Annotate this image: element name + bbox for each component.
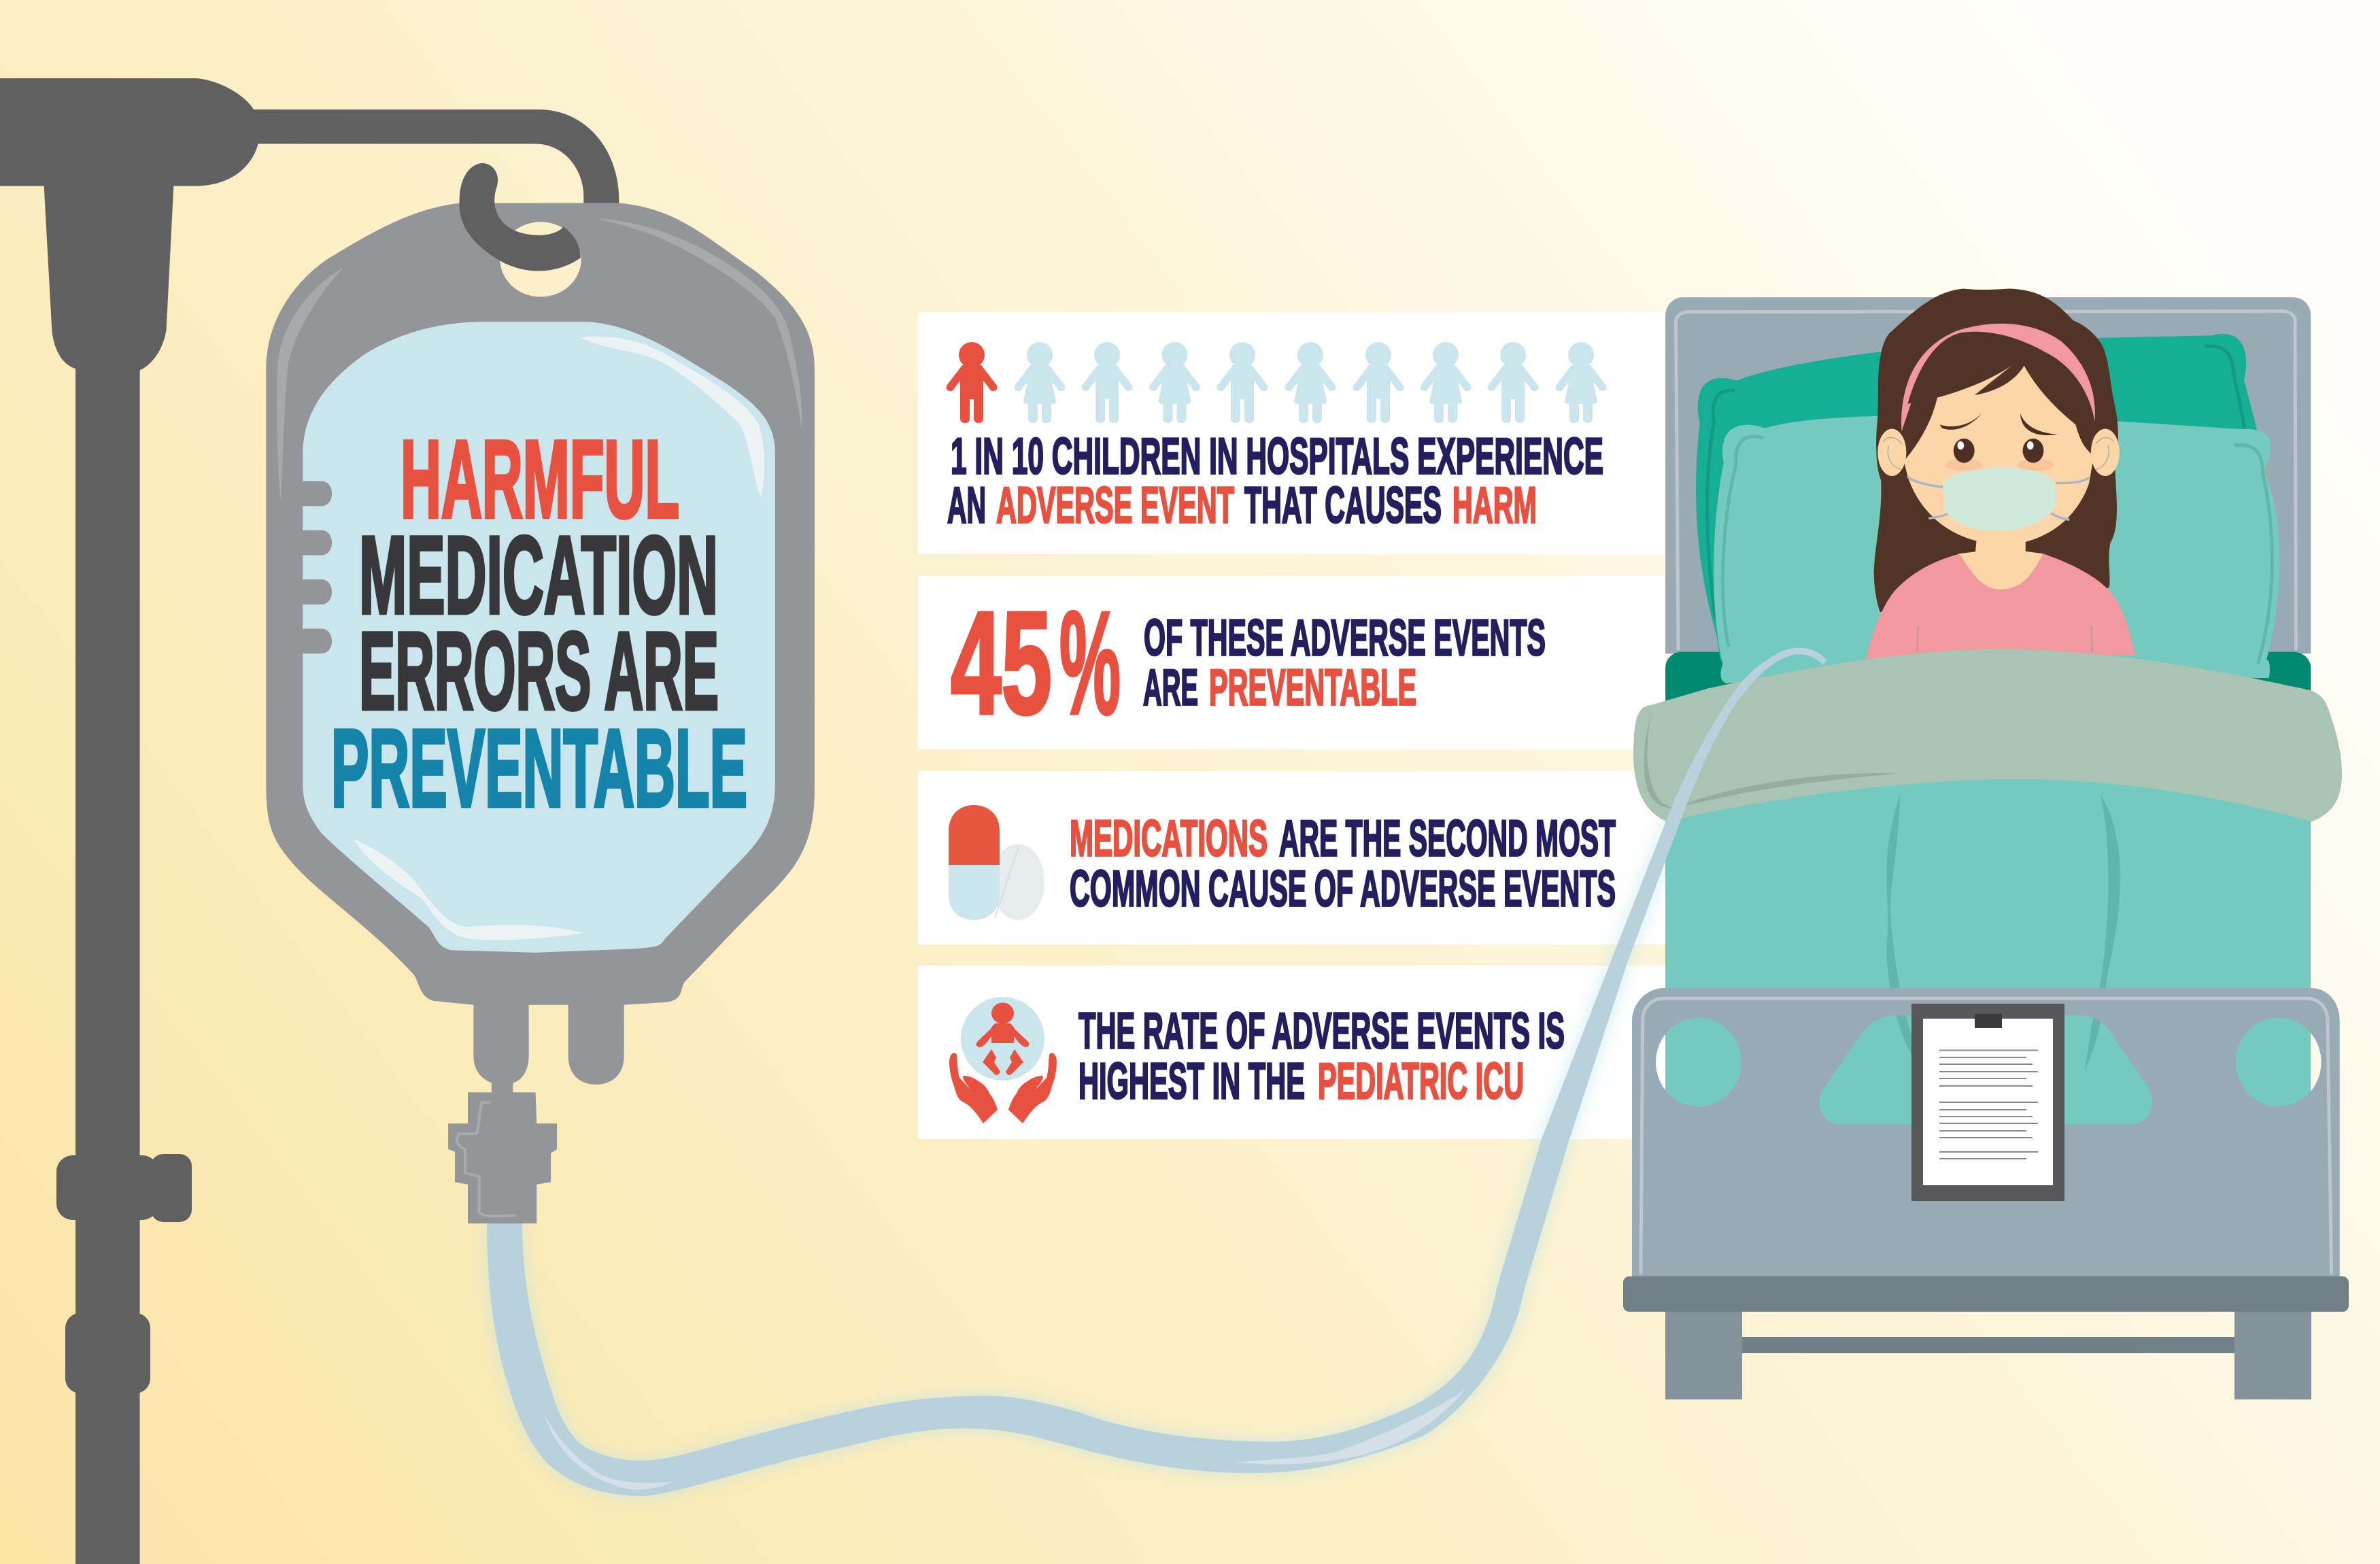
text: are preventable: PREVENTABLE bbox=[1209, 658, 1416, 715]
icon: row of ten children bbox=[947, 342, 1606, 423]
panel: 45 percent preventable: % bbox=[1059, 581, 1121, 745]
text: 1 in 10 children line 2: HARM bbox=[1452, 476, 1537, 533]
text: 1 in 10 children line 1: 1 IN 10 CHILDREN IN HOSPITALS EXPERIENCE bbox=[951, 427, 1603, 484]
clipboard bbox=[1911, 1004, 2064, 1201]
IV bag bbox=[266, 163, 815, 1223]
title: preventable: PREVENTABLE bbox=[331, 707, 747, 830]
icon: capsule and tablet bbox=[949, 805, 1044, 920]
panel: medications second most common cause bbox=[918, 771, 1666, 945]
panel: 45 percent preventable bbox=[918, 576, 1666, 749]
tube glow bbox=[487, 816, 1682, 1496]
face mask bbox=[1943, 467, 2056, 531]
text: 1 in 10 children line 2: THAT CAUSES bbox=[1244, 476, 1442, 533]
title: harmful: HARMFUL bbox=[401, 418, 679, 541]
bed frame bar and legs bbox=[1623, 1276, 2349, 1399]
eyes bbox=[1945, 439, 2054, 471]
IV tube bbox=[487, 648, 1826, 1496]
title: medication: MEDICATION bbox=[359, 514, 718, 636]
text: common cause of adverse events: COMMON CAUSE OF ADVERSE EVENTS bbox=[1070, 860, 1616, 917]
liquid bbox=[303, 322, 775, 953]
bag highlights bbox=[277, 219, 802, 501]
liquid highlights bbox=[354, 337, 764, 940]
headband bbox=[1901, 324, 2095, 432]
panel: pediatric ICU bbox=[918, 966, 1666, 1139]
shirt bbox=[1866, 554, 2135, 659]
eyebrows bbox=[1939, 413, 2058, 435]
pillows bbox=[1696, 334, 2279, 683]
mask straps bbox=[1907, 477, 2089, 520]
text: 1 in 10 children line 2: AN bbox=[947, 476, 986, 533]
text: the rate of adverse events is: THE RATE OF ADVERSE EVENTS IS bbox=[1078, 1002, 1565, 1059]
bag body with hanger hole and connector bbox=[266, 203, 815, 1223]
patient: girl with mask bbox=[1866, 288, 2135, 659]
title: ERRORS ARE bbox=[359, 609, 719, 733]
illustration: hospital bed and patient bbox=[1623, 288, 2349, 1399]
title bbox=[331, 418, 747, 830]
text: 1 in 10 children line 2: ADVERSE EVENT bbox=[996, 476, 1234, 533]
footboard bbox=[1632, 988, 2340, 1276]
text: are preventable: ARE bbox=[1143, 658, 1198, 715]
bed body teal bbox=[1665, 748, 2311, 1170]
bedsheet folds bbox=[1886, 794, 2120, 1070]
text: medications are the second most: ARE THE SECOND MOST bbox=[1279, 809, 1616, 866]
text: medications are the second most: MEDICATIONS bbox=[1070, 809, 1268, 866]
connector highlight bbox=[457, 1102, 516, 1216]
hook bbox=[459, 163, 581, 271]
text: of these adverse events: OF THESE ADVERSE EVENTS bbox=[1144, 609, 1546, 666]
stat: 45%: 45 bbox=[951, 581, 1052, 745]
icon: baby in caring hands bbox=[949, 997, 1057, 1123]
ears bbox=[1877, 429, 2120, 476]
text: highest in the pediatric ICU: PEDIATRIC ICU bbox=[1318, 1053, 1524, 1110]
text: highest in the pediatric ICU: HIGHEST IN THE bbox=[1078, 1053, 1305, 1110]
panel: 1 in 10 children bbox=[918, 312, 1666, 554]
headboard bbox=[1665, 297, 2311, 723]
blanket bbox=[1633, 649, 2342, 821]
face bbox=[1904, 362, 2094, 590]
hair bbox=[1874, 288, 2118, 612]
icon: IV pole bbox=[0, 78, 619, 1564]
